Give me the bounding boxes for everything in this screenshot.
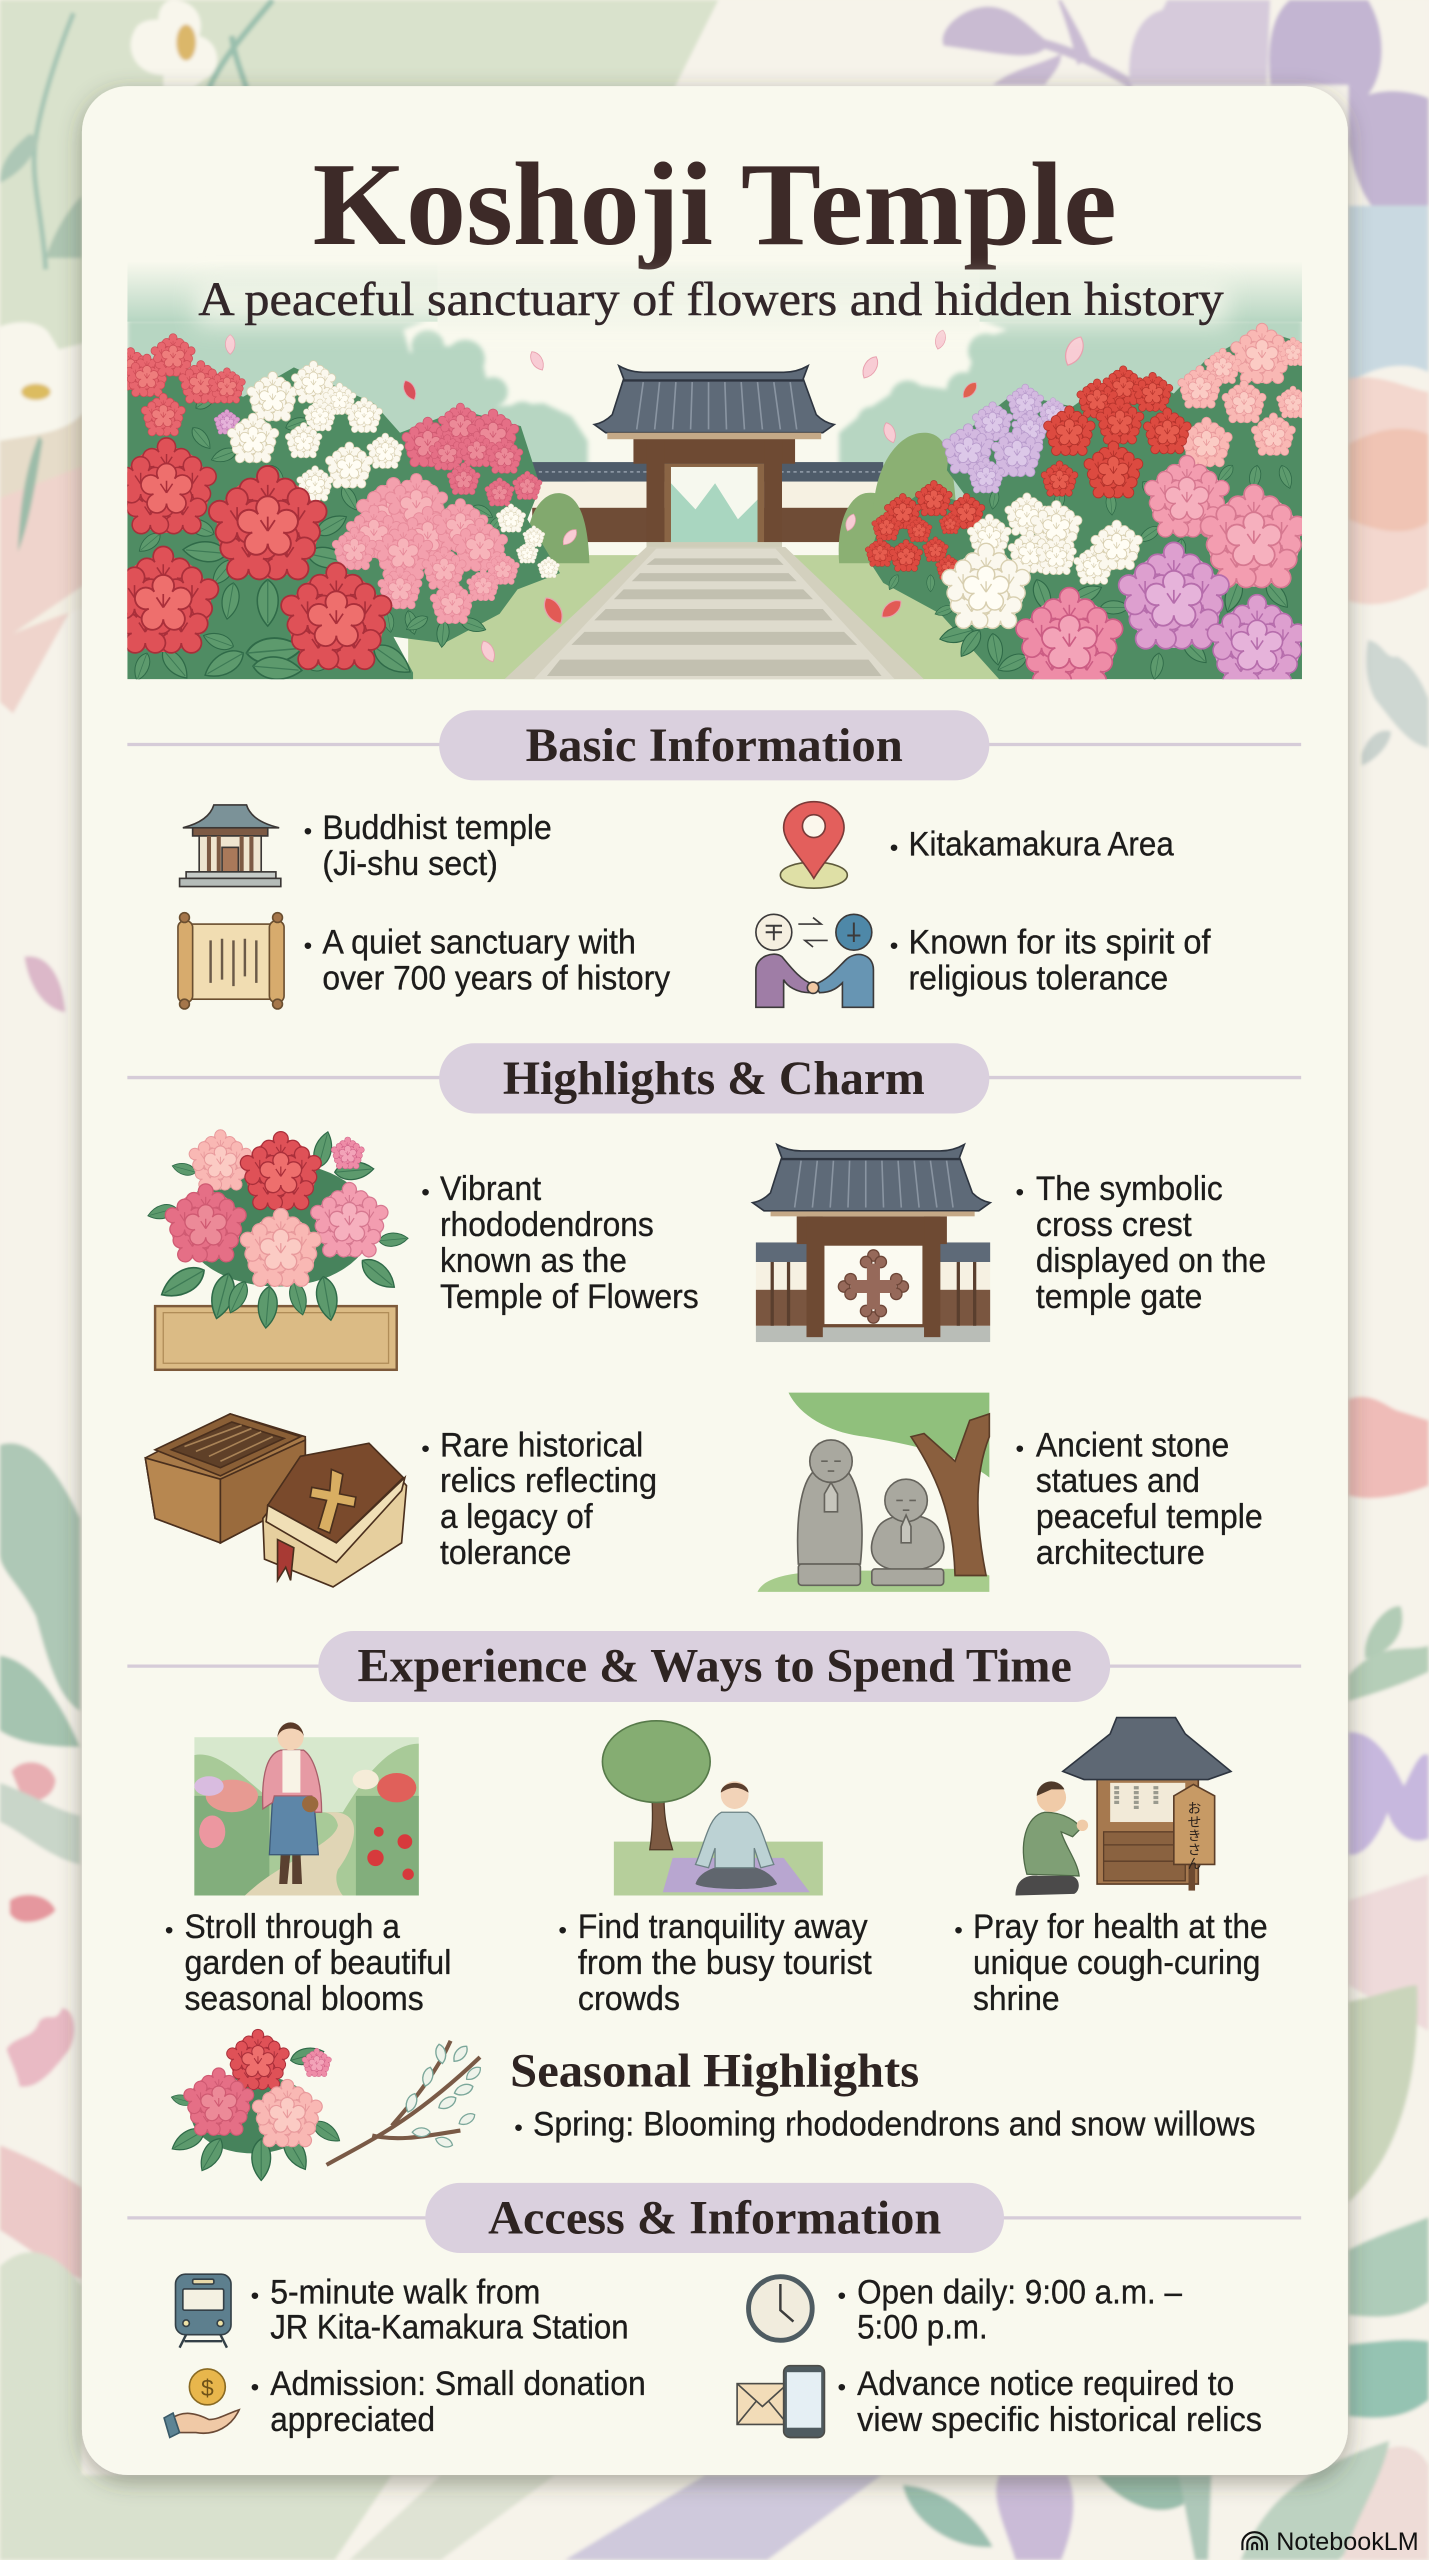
- temple gate: [594, 366, 834, 547]
- text: walk from station: 5-minute walk from: [270, 2274, 540, 2312]
- text: rare historical relics: a legacy of: [440, 1498, 593, 1536]
- text: symbolic cross crest: temple gate: [1036, 1278, 1202, 1316]
- icon: clock: [749, 2277, 812, 2340]
- text: admission: •: [251, 2374, 259, 2401]
- heading: Experience & Ways to Spend Time: Experience & Ways to Spend Time: [358, 1641, 1072, 1693]
- icon: rhododendron bouquet with wooden box: [146, 1130, 409, 1370]
- text: symbolic cross crest: •: [1015, 1179, 1024, 1206]
- text: walk from station: •: [251, 2283, 259, 2310]
- icon: envelope and phone: [737, 2366, 824, 2438]
- text: Kitakamakura Area: •: [890, 835, 898, 862]
- text: vibrant rhododendrons: known as the: [440, 1242, 627, 1280]
- NotebookLM watermark: NotebookLM: [1276, 2528, 1419, 2556]
- text: advance notice: Advance notice required to: [857, 2365, 1234, 2403]
- text: walk from station: JR Kita-Kamakura Station: [270, 2309, 629, 2347]
- background trees: [127, 320, 1303, 506]
- icon: relic chest and holy book: [145, 1414, 407, 1587]
- text: vibrant rhododendrons: •: [421, 1179, 430, 1206]
- heading: Seasonal Highlights: Seasonal Highlights: [510, 2045, 919, 2097]
- heading: Highlights & Charm: Highlights & Charm: [503, 1053, 925, 1105]
- text: symbolic cross crest: displayed on the: [1036, 1242, 1266, 1280]
- icon: stone statues under tree: [758, 1393, 989, 1592]
- text: stroll through garden: Stroll through a: [184, 1908, 401, 1946]
- icon: meditation under tree: [602, 1721, 823, 1895]
- ground and grass: [408, 555, 1020, 679]
- text: symbolic cross crest: The symbolic: [1036, 1170, 1223, 1208]
- wall: [532, 462, 883, 542]
- text: admission: [251, 2365, 646, 2439]
- text: stroll through garden: seasonal blooms: [184, 1980, 424, 2018]
- text: rare historical relics: tolerance: [440, 1534, 571, 1572]
- text: vibrant rhododendrons: Temple of Flowers: [440, 1278, 699, 1316]
- icon: temple: [180, 805, 281, 887]
- text: opening hours: Open daily: 9:00 a.m. –: [857, 2274, 1183, 2312]
- icon: train: [176, 2274, 231, 2348]
- icon: location pin: [780, 802, 847, 888]
- text: quiet sanctuary: •: [304, 932, 312, 959]
- text: Buddhist temple: (Ji-shu sect): [322, 845, 498, 883]
- text: rare historical relics: •: [421, 1435, 430, 1462]
- section: Highlights & Charm: [127, 1043, 1301, 1113]
- text: quiet sanctuary: A quiet sanctuary with: [322, 923, 636, 961]
- text: find tranquility: [558, 1908, 872, 2018]
- icon: coin in hand: [164, 2369, 239, 2438]
- text: opening hours: •: [838, 2283, 846, 2310]
- left rhododendrons: [108, 334, 560, 669]
- right rhododendrons: [865, 323, 1310, 690]
- text: pray for health: shrine: [973, 1980, 1060, 2018]
- text: pray for health: Pray for health at the: [973, 1908, 1268, 1946]
- text: religious tolerance: Known for its spirit of: [909, 923, 1211, 961]
- text: Buddhist temple: Buddhist temple: [322, 809, 552, 847]
- heading: Basic Information: Basic Information: [526, 720, 903, 772]
- text: admission: Admission: Small donation: [270, 2365, 646, 2403]
- text: symbolic cross crest: [1015, 1170, 1266, 1316]
- hero leaves: [131, 390, 1295, 684]
- falling petals: [225, 329, 1088, 664]
- text: admission: appreciated: [270, 2401, 435, 2439]
- text: religious tolerance: religious tolerance: [909, 959, 1168, 997]
- text: religious tolerance: [890, 923, 1211, 997]
- text: symbolic cross crest: cross crest: [1036, 1206, 1192, 1244]
- left dark foliage: [127, 359, 560, 679]
- text: advance notice: view specific historical relics: [857, 2401, 1262, 2439]
- text: ancient stone statues: statues and: [1036, 1462, 1200, 1500]
- text: walk from station: [251, 2274, 629, 2347]
- text: Buddhist temple: [304, 809, 552, 883]
- text: stroll through garden: •: [165, 1917, 173, 1944]
- text: pray for health: unique cough-curing: [973, 1944, 1260, 1982]
- icon: spring flowers and snow willow branch: [168, 2029, 483, 2180]
- text: ancient stone statues: architecture: [1036, 1534, 1205, 1572]
- text: rare historical relics: Rare historical: [440, 1426, 643, 1464]
- text: opening hours: [838, 2274, 1183, 2347]
- text: find tranquility: crowds: [578, 1980, 680, 2018]
- text: ancient stone statues: •: [1015, 1435, 1024, 1462]
- icon: cough-curing shrine with worshipper: [1015, 1718, 1231, 1895]
- text: opening hours: 5:00 p.m.: [857, 2309, 988, 2347]
- icon: cough-curing shrine with worshipper: おせきさん: [1185, 1801, 1201, 1870]
- icon: scroll: [178, 913, 284, 1009]
- text: advance notice: [838, 2365, 1262, 2439]
- text: vibrant rhododendrons: Vibrant: [440, 1170, 542, 1208]
- text: rare historical relics: relics reflecting: [440, 1462, 657, 1500]
- subtitle: A peaceful sanctuary of flowers and hidden history: [198, 274, 1224, 326]
- text: Kitakamakura Area: Kitakamakura Area: [909, 826, 1175, 864]
- text: find tranquility: •: [558, 1917, 567, 1944]
- right dark foliage: [869, 330, 1303, 679]
- text: advance notice: •: [838, 2374, 846, 2401]
- bushes by the gate: [526, 493, 589, 563]
- section: Access & Information: [127, 2183, 1301, 2253]
- text: quiet sanctuary: over 700 years of history: [322, 959, 671, 997]
- icon: strolling visitor in garden: [194, 1722, 420, 1895]
- heading: Access & Information: Access & Information: [488, 2192, 941, 2244]
- text: vibrant rhododendrons: rhododendrons: [440, 1206, 654, 1244]
- text: Buddhist temple: •: [304, 818, 312, 845]
- text: stroll through garden: [165, 1908, 451, 2018]
- text: find tranquility: Find tranquility away: [578, 1908, 869, 1946]
- text: ancient stone statues: [1015, 1426, 1263, 1572]
- text: stroll through garden: garden of beautiful: [184, 1944, 451, 1982]
- text: find tranquility: from the busy tourist: [578, 1944, 872, 1982]
- text: ancient stone statues: peaceful temple: [1036, 1498, 1263, 1536]
- stone steps: [504, 547, 924, 679]
- icon: coin in hand: $: [201, 2375, 214, 2401]
- cross crest: [838, 1250, 909, 1323]
- text: religious tolerance: •: [890, 932, 898, 959]
- text: pray for health: •: [954, 1917, 963, 1944]
- text: spring highlights: Spring: Blooming rhododendrons and snow willows: [533, 2105, 1255, 2143]
- text: vibrant rhododendrons: [421, 1170, 699, 1316]
- hero illustration: temple gate and rhododendrons: [108, 261, 1310, 690]
- text: pray for health: [954, 1908, 1268, 2018]
- text: ancient stone statues: Ancient stone: [1036, 1426, 1229, 1464]
- title: Koshoji Temple: [313, 139, 1117, 270]
- text: rare historical relics: [421, 1426, 657, 1572]
- section: Basic Information: [127, 710, 1301, 780]
- icon: handshake between faiths: [756, 914, 873, 1007]
- text: spring highlights: •: [514, 2114, 523, 2141]
- text: quiet sanctuary: [304, 923, 671, 997]
- icon: gate with cross crest: [753, 1144, 990, 1342]
- section: Experience & Ways to Spend Time: [127, 1631, 1301, 1702]
